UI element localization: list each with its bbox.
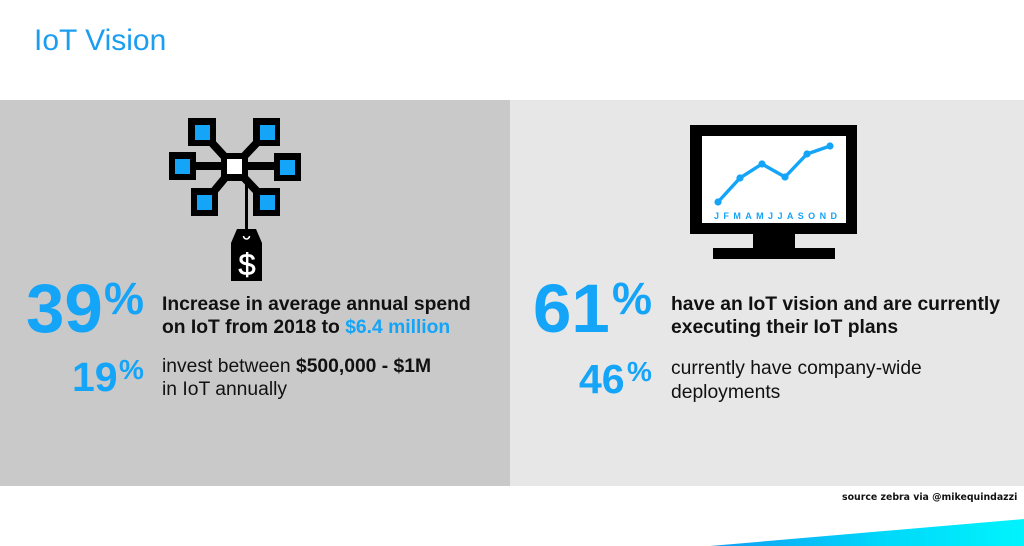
decorative corner wedge bbox=[710, 519, 1024, 546]
source credit: source zebra via @mikequindazzi bbox=[842, 492, 1017, 503]
stat: 19 percent: 19 bbox=[72, 354, 118, 400]
stat: 61 percent bbox=[533, 270, 652, 347]
stat: 39 percent bbox=[26, 270, 144, 347]
stat: 46 percent: % bbox=[627, 356, 652, 387]
icon: monitor with line chart: JFMAMJJASOND bbox=[714, 211, 838, 221]
panel: spend bbox=[0, 100, 510, 486]
stat: 19 percent bbox=[72, 354, 144, 400]
stat: 46 percent: 46 bbox=[579, 356, 625, 402]
text: increase in annual spend: on IoT from 2018 to $6.4 million bbox=[162, 317, 450, 338]
stat: 46 percent bbox=[579, 356, 652, 402]
text: company-wide deployments: currently have company-wide bbox=[671, 358, 922, 379]
icon: network with price tag: $ bbox=[238, 247, 256, 282]
stat: 61 percent: 61 bbox=[533, 270, 610, 347]
text: have an IoT vision: executing their IoT plans bbox=[671, 317, 898, 338]
text: invest between: in IoT annually bbox=[162, 379, 287, 400]
text: company-wide deployments: deployments bbox=[671, 382, 780, 402]
panel: vision bbox=[510, 100, 1024, 486]
stat: 61 percent: % bbox=[612, 273, 652, 324]
text: invest between: invest between $500,000 - $1M bbox=[162, 356, 431, 376]
stat: 19 percent: % bbox=[119, 354, 144, 385]
title: IoT Vision bbox=[34, 24, 166, 57]
icon: network with price tag bbox=[169, 118, 301, 282]
stat: 39 percent: % bbox=[104, 273, 144, 324]
text: invest between bbox=[162, 356, 431, 400]
stat: 39 percent: 39 bbox=[26, 270, 103, 347]
text: increase in annual spend: Increase in average annual spend bbox=[162, 294, 471, 314]
text: have an IoT vision: have an IoT vision and are currently bbox=[671, 294, 1000, 314]
text: increase in annual spend bbox=[162, 294, 471, 338]
text: company-wide deployments bbox=[671, 358, 922, 402]
text: have an IoT vision bbox=[671, 294, 1000, 338]
icon: monitor with line chart bbox=[690, 125, 857, 259]
